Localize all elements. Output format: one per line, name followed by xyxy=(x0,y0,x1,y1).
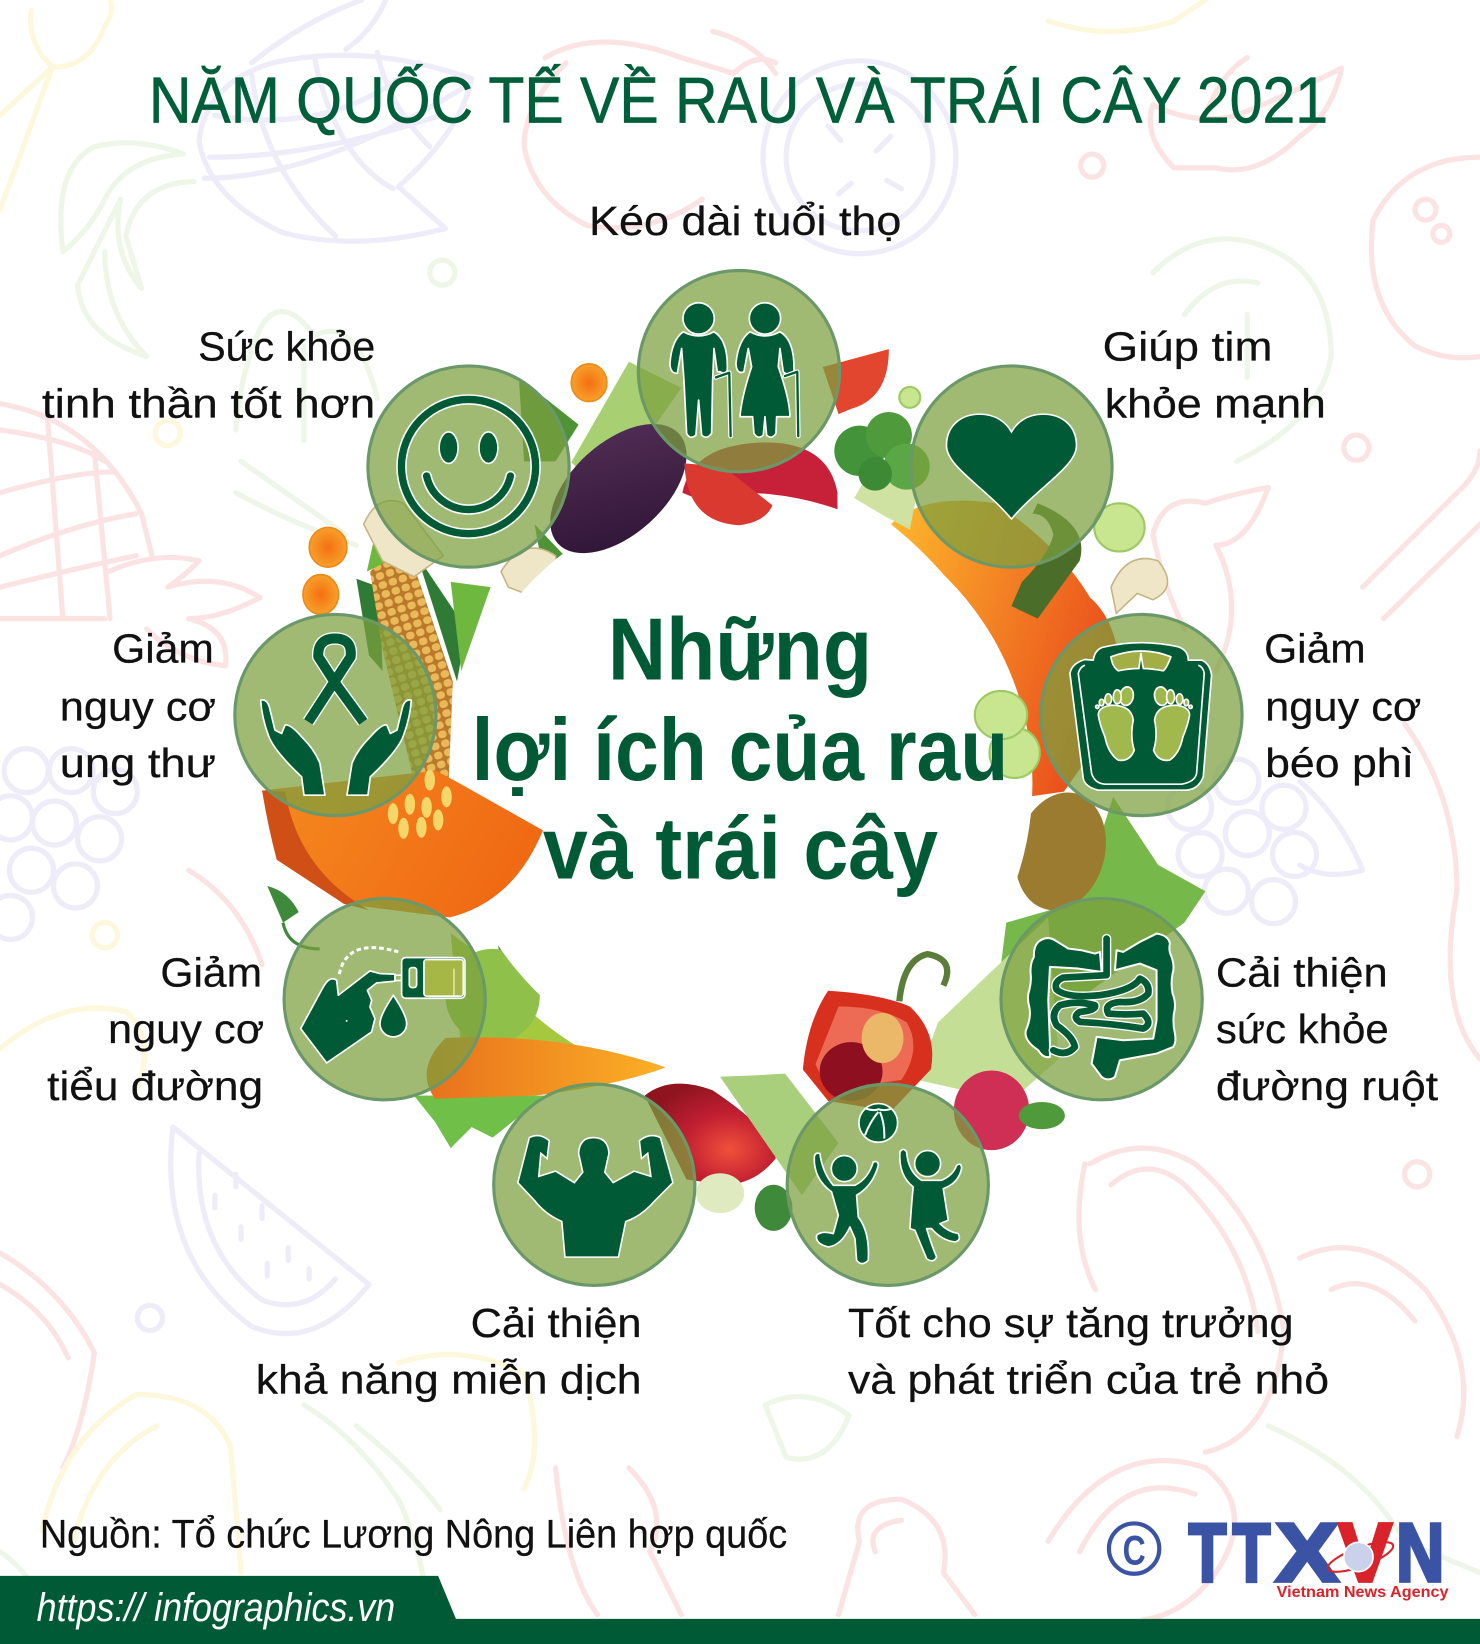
badge: diabetes xyxy=(284,899,485,1100)
label: digestion xyxy=(1216,950,1439,1109)
wordmark: N xyxy=(1396,1506,1444,1599)
benefit: digestion xyxy=(1001,899,1439,1109)
icon: ribbon and hands xyxy=(261,638,411,795)
label: immunity xyxy=(256,1300,641,1402)
label: children growth xyxy=(848,1300,1329,1402)
vegetable: cucumber slices xyxy=(899,387,1145,778)
benefit: mental health xyxy=(42,324,569,567)
center heading: lợi ích của rau xyxy=(472,700,1008,799)
vegetable: squash and lettuce xyxy=(267,886,618,1148)
label: obesity: nguy cơ xyxy=(1265,683,1421,729)
badge: heart xyxy=(911,366,1112,567)
vegetable: leaves behind smiley xyxy=(519,377,579,582)
vegetable: carrot slices xyxy=(303,364,1173,913)
copyright mark: C xyxy=(1123,1526,1146,1573)
label: longevity: Kéo dài tuổi thọ xyxy=(589,198,901,244)
label: mental health xyxy=(42,324,375,426)
label: obesity: Giảm xyxy=(1264,626,1366,672)
badge: children growth xyxy=(787,1084,988,1285)
vegetable: radish xyxy=(954,1070,1065,1150)
label: heart xyxy=(1103,324,1326,426)
vegetable: bell pepper xyxy=(803,954,947,1111)
center heading: và trái cây xyxy=(543,799,938,898)
benefit: heart xyxy=(911,324,1326,567)
label: digestion: đường ruột xyxy=(1216,1063,1439,1109)
wordmark: X xyxy=(1276,1506,1338,1599)
benefit: longevity xyxy=(589,198,901,472)
badge: immunity xyxy=(494,1084,695,1285)
badge: longevity xyxy=(638,271,840,472)
label: digestion: Cải thiện xyxy=(1216,950,1388,996)
label: cancer: nguy cơ xyxy=(60,683,216,729)
icon: smiley xyxy=(401,399,536,534)
vegetable ring xyxy=(267,349,1205,1231)
wordmark: V xyxy=(1338,1506,1392,1599)
footer banner xyxy=(0,1576,1480,1644)
label: mental health: tinh thần tốt hơn xyxy=(42,380,375,426)
benefit: children growth xyxy=(787,1084,1329,1402)
badge: mental health xyxy=(368,366,569,567)
icon: intestines xyxy=(1026,934,1175,1079)
vegetable: broccoli xyxy=(834,412,930,529)
vegetable: celery stalk xyxy=(720,1074,839,1195)
icon: heart xyxy=(946,414,1076,519)
label: heart: Giúp tim xyxy=(1103,324,1272,370)
vegetable: carrot xyxy=(427,1037,666,1099)
agency name: Vietnam News Agency xyxy=(1277,1584,1449,1601)
benefit: immunity xyxy=(256,1084,695,1402)
vegetable: eggplant xyxy=(527,400,710,578)
wordmark: T xyxy=(1189,1506,1226,1599)
benefit: cancer xyxy=(60,614,436,816)
benefit: diabetes xyxy=(47,899,485,1109)
badge: obesity xyxy=(1041,614,1242,816)
wordmark: T xyxy=(1233,1506,1270,1599)
label: cancer: Giảm xyxy=(112,626,214,672)
center heading xyxy=(472,599,1008,898)
vegetable: pumpkin wedge xyxy=(262,770,543,917)
vegetable: potato and stalks xyxy=(991,782,1205,1048)
wordmark xyxy=(1189,1506,1444,1599)
footer url: https:// infographics.vn xyxy=(37,1586,395,1630)
icon: muscular man xyxy=(518,1136,673,1257)
label: children growth: Tốt cho sự tăng trưởng xyxy=(848,1300,1293,1346)
label: obesity xyxy=(1264,626,1421,786)
label: obesity: béo phì xyxy=(1265,740,1414,786)
label: diabetes xyxy=(47,950,264,1109)
label: cancer xyxy=(60,626,216,786)
vegetable: tomato wedge xyxy=(823,349,889,414)
copyright mark xyxy=(1109,1523,1159,1574)
center white circle xyxy=(450,493,1032,1076)
icon: bathroom scale xyxy=(1070,643,1212,790)
label: mental health: Sức khỏe xyxy=(198,324,375,370)
label: cancer: ung thư xyxy=(60,740,216,786)
vegetable: tomato slice xyxy=(684,463,772,525)
badge: digestion xyxy=(1001,899,1202,1100)
logo: TTXVN xyxy=(1109,1506,1449,1601)
icon: glucose meter and hand xyxy=(301,948,465,1063)
vegetable: pumpkin right xyxy=(891,501,1121,797)
vegetable: red tomato xyxy=(682,442,837,514)
source note: Nguồn: Tổ chức Lương Nông Liên hợp quốc xyxy=(40,1513,787,1557)
label: diabetes: tiểu đường xyxy=(47,1063,263,1109)
label: children growth: và phát triển của trẻ nhỏ xyxy=(848,1356,1329,1402)
foreground vegetables over the circle xyxy=(262,387,1145,1111)
label: heart: khỏe mạnh xyxy=(1105,380,1326,426)
globe swoosh xyxy=(1325,1536,1396,1578)
label: diabetes: nguy cơ xyxy=(108,1006,264,1052)
vegetable: cabbage xyxy=(917,917,1059,1101)
icon: children playing xyxy=(814,1104,962,1264)
center heading: Những xyxy=(608,599,872,698)
title: NĂM QUỐC TẾ VỀ RAU VÀ TRÁI CÂY 2021 xyxy=(149,64,1328,137)
vegetable: mushrooms xyxy=(364,501,1168,613)
benefit: obesity xyxy=(1041,614,1421,816)
icon: elderly couple xyxy=(670,303,798,437)
label: immunity: Cải thiện xyxy=(471,1300,641,1346)
vegetable: corn xyxy=(356,524,491,781)
label: diabetes: Giảm xyxy=(160,950,262,996)
vegetable: beet xyxy=(645,1084,776,1185)
label: digestion: sức khỏe xyxy=(1216,1006,1389,1052)
label: immunity: khả năng miễn dịch xyxy=(256,1356,641,1402)
vegetable: zucchini xyxy=(571,362,681,477)
badge: cancer xyxy=(235,614,436,816)
